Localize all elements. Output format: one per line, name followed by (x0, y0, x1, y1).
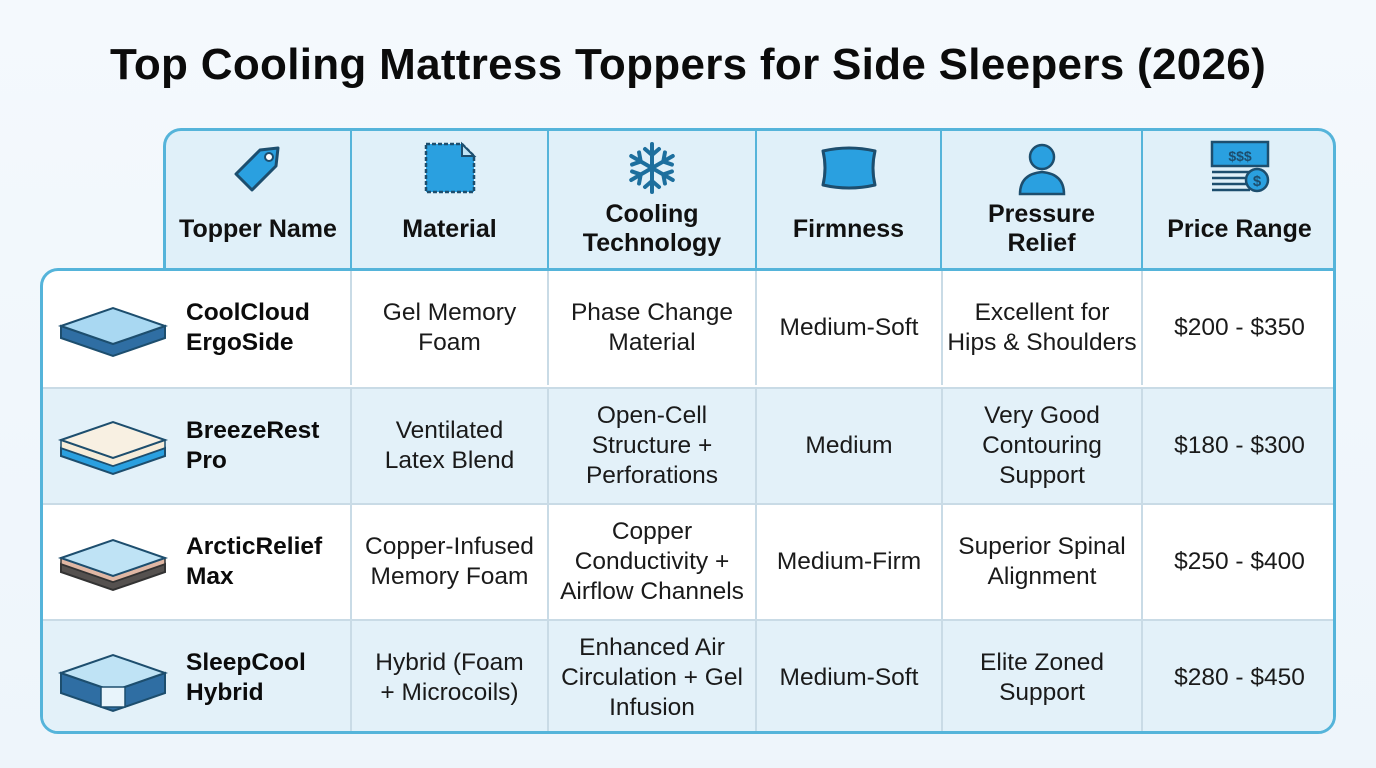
row 2: BreezeRest Pro: Perforations (586, 462, 718, 489)
row 2: BreezeRest Pro: $180 - $300 (1174, 432, 1305, 459)
row 4: SleepCool Hybrid: Infusion (609, 694, 695, 721)
row 4: SleepCool Hybrid: Hybrid (Foam (375, 649, 524, 676)
row 4: SleepCool Hybrid: Enhanced Air (579, 634, 725, 661)
header: firmness: Firmness (793, 214, 904, 242)
header: price range (1141, 131, 1336, 269)
row 1: CoolCloud ErgoSide: Medium-Soft (780, 314, 918, 341)
header: topper name: Topper Name (179, 214, 337, 242)
row 3: ArcticRelief Max: Medium-Firm (777, 548, 921, 575)
header: material (350, 131, 547, 269)
header: firmness (755, 131, 940, 269)
header: material: Material (402, 214, 497, 242)
row 2: BreezeRest Pro: Very Good (984, 402, 1100, 429)
header: price range: $ (1252, 173, 1261, 190)
row 4: SleepCool Hybrid: Medium-Soft (780, 664, 918, 691)
row 1: CoolCloud ErgoSide: Gel Memory (383, 299, 516, 326)
row 4: SleepCool Hybrid (43, 619, 1333, 735)
row 4: SleepCool Hybrid: Circulation + Gel (561, 664, 743, 691)
row 4: SleepCool Hybrid: Support (999, 679, 1085, 706)
row 4: SleepCool Hybrid: + Microcoils) (380, 679, 519, 706)
row 3: ArcticRelief Max: Superior Spinal (958, 533, 1126, 560)
header: pressure relief: Pressure (988, 200, 1095, 228)
row 2: BreezeRest Pro: Ventilated (396, 417, 503, 444)
icon: hybrid topper (58, 654, 168, 712)
row 1: CoolCloud ErgoSide: Hips & Shoulders (947, 329, 1137, 356)
row 3: ArcticRelief Max: Copper (612, 518, 692, 545)
row 2: BreezeRest Pro: Latex Blend (385, 447, 514, 474)
row 3: ArcticRelief Max: Memory Foam (371, 563, 528, 590)
header: price range: $$$ (1228, 148, 1251, 164)
header: cooling technology (547, 131, 755, 269)
row 2: BreezeRest Pro: BreezeRest (186, 417, 319, 444)
row 1: CoolCloud ErgoSide: $200 - $350 (1174, 314, 1305, 341)
row 2: BreezeRest Pro: Pro (186, 447, 227, 474)
header row (163, 128, 1336, 269)
row 1: CoolCloud ErgoSide: CoolCloud (186, 299, 310, 326)
row 4: SleepCool Hybrid: $280 - $450 (1174, 664, 1305, 691)
row 1: CoolCloud ErgoSide: Excellent for (975, 299, 1109, 326)
header: pressure relief (940, 131, 1141, 269)
header: pressure relief: Relief (1007, 229, 1076, 257)
icon: copper topper (58, 539, 168, 591)
row 3: ArcticRelief Max: Alignment (988, 563, 1096, 590)
header: price range: Price Range (1167, 214, 1312, 242)
row 2: BreezeRest Pro: Medium (805, 432, 893, 459)
title: Top Cooling Mattress Toppers for Side Sleepers (2026) (110, 40, 1266, 89)
row 2: BreezeRest Pro: Structure + (592, 432, 712, 459)
header: cooling technology: Cooling (605, 200, 699, 228)
icon: topper gel (58, 307, 168, 357)
row 4: SleepCool Hybrid: SleepCool (186, 649, 306, 676)
row 1: CoolCloud ErgoSide: Phase Change (571, 299, 733, 326)
row 2: BreezeRest Pro: Contouring (982, 432, 1102, 459)
row 2: BreezeRest Pro (43, 387, 1333, 503)
row 1: CoolCloud ErgoSide: Material (608, 329, 696, 356)
row 4: SleepCool Hybrid: Elite Zoned (980, 649, 1104, 676)
row 3: ArcticRelief Max: Max (186, 563, 234, 590)
row 3: ArcticRelief Max: ArcticRelief (186, 533, 322, 560)
row 4: SleepCool Hybrid: Hybrid (186, 679, 264, 706)
header: cooling technology: Technology (583, 229, 721, 257)
table body (40, 268, 1336, 734)
row 1: CoolCloud ErgoSide: ErgoSide (186, 329, 294, 356)
row 3: ArcticRelief Max (43, 503, 1333, 619)
icon: latex topper (58, 421, 168, 475)
row 2: BreezeRest Pro: Support (999, 462, 1085, 489)
row 3: ArcticRelief Max: Conductivity + (575, 548, 729, 575)
row 1: CoolCloud ErgoSide (58, 271, 1305, 385)
row 3: ArcticRelief Max: Airflow Channels (560, 578, 744, 605)
row 3: ArcticRelief Max: Copper-Infused (365, 533, 534, 560)
row 3: ArcticRelief Max: $250 - $400 (1174, 548, 1305, 575)
header: topper name (179, 146, 337, 242)
row 1: CoolCloud ErgoSide: Foam (418, 329, 481, 356)
row 2: BreezeRest Pro: Open-Cell (597, 402, 707, 429)
